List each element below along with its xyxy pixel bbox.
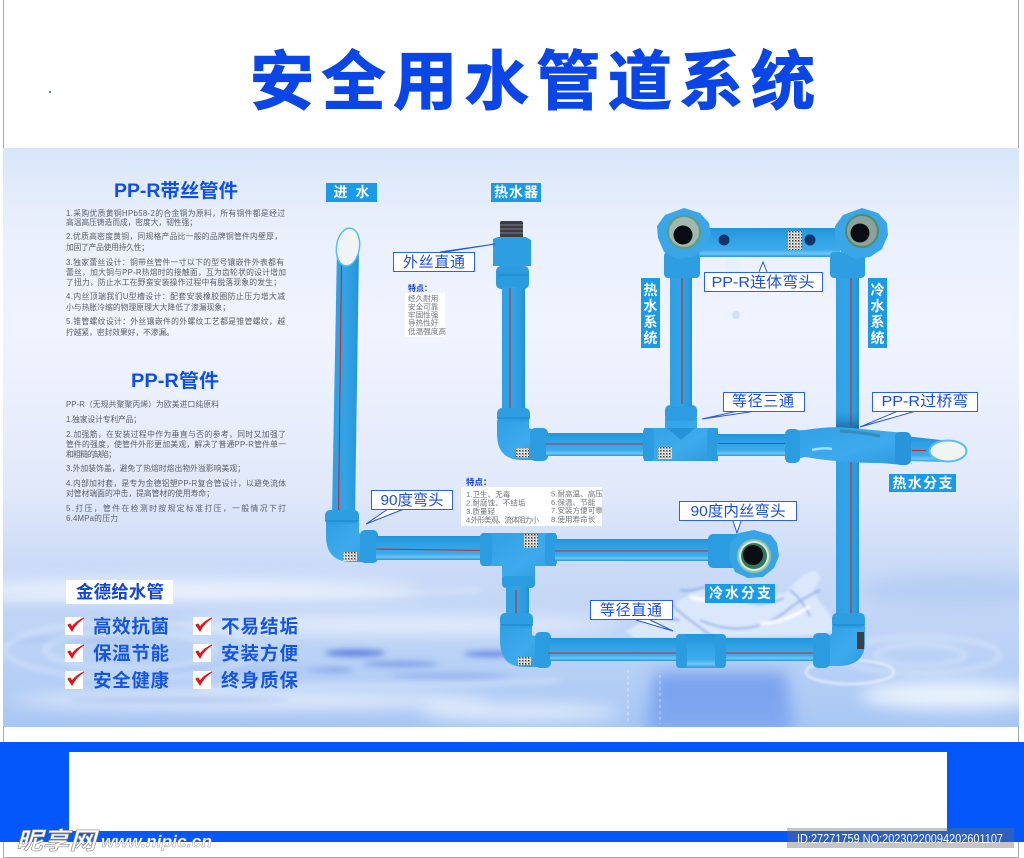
lower right elbow xyxy=(813,613,865,668)
body list: 高温高压铸造而成，密度大，韧性强； xyxy=(66,217,197,227)
features heading: 特点： xyxy=(466,477,492,487)
QR sticker xyxy=(788,231,802,250)
lower left elbow xyxy=(500,613,551,668)
callout: PP-R joined elbow: PP-R连体弯头 xyxy=(712,274,814,291)
callout: equal tee: 等径三通 xyxy=(732,392,794,410)
features list: 经久耐用 xyxy=(408,293,438,303)
90 degree inner-thread elbow xyxy=(708,530,779,578)
text block: PP-R fittings xyxy=(66,369,286,523)
body list: PP-R（无规共聚聚丙烯）为欧美进口纯原料 xyxy=(66,399,219,409)
body list: 3.外加装饰盖，避免了热熔时熔出物外溢影响美观； xyxy=(66,463,245,473)
90 degree elbow xyxy=(325,510,378,563)
pipe reflection xyxy=(645,672,795,735)
callout: male-thread straight: 外丝直通 xyxy=(403,254,465,271)
callout: equal straight xyxy=(590,600,673,631)
body list: 了扭力，防止水工在野蛮安装操作过程中有脱落现象的发生； xyxy=(66,277,281,287)
tag: inlet: 进 水 xyxy=(334,184,370,200)
features list: 4.外形美观、流体阻力小 xyxy=(466,514,539,524)
outlet pipe to inner-thread elbow xyxy=(555,539,710,561)
tag: water heater: 热水器 xyxy=(494,184,538,200)
watermark id xyxy=(787,828,1014,848)
body list: 4.内丝顶端我们U型槽设计：配套安装橡胶圈防止压力增大减 xyxy=(66,291,285,301)
tag: cold water system: 冷 xyxy=(870,282,884,298)
callout: 90 degree inner-thread elbow xyxy=(680,502,796,533)
crossover elbow xyxy=(785,427,911,465)
stem pipe xyxy=(506,586,529,616)
right threaded port xyxy=(835,208,888,259)
body list: 4.内部加衬套，是专为金德铝塑PP-R复合管设计，以避免流体 xyxy=(66,478,286,488)
tag: hot water system: 热 xyxy=(644,282,658,298)
tag: hot water system: 系 xyxy=(644,314,658,330)
hot branch opening xyxy=(930,440,966,462)
pipe: cold water riser xyxy=(813,262,865,668)
callout: 90 degree inner-thread elbow: 90度内丝弯头 xyxy=(690,503,786,520)
small dot xyxy=(49,91,51,93)
vertical pipe xyxy=(502,287,525,411)
mounting holes xyxy=(718,234,816,246)
body list: 6.4MPa的压力 xyxy=(66,513,118,523)
features list: 7.安装方便可靠 xyxy=(551,505,603,515)
callout: 90 degree elbow xyxy=(366,490,452,524)
pipe: hot water run xyxy=(493,221,966,465)
watermark logo: www.nipic.cn xyxy=(101,832,212,851)
body list: 5.锥管螺纹设计：外丝镶嵌件的外螺纹工艺都是锥管螺纹，越 xyxy=(66,316,285,326)
hot elbow xyxy=(497,408,548,461)
callout: PP-R crossover xyxy=(860,392,978,427)
features list: 3.质量轻 xyxy=(466,506,496,516)
hot riser xyxy=(670,262,692,407)
body list: 蕾丝，加大铜与PP-R热熔时的接触面，互为齿轮状的设计增加 xyxy=(66,267,286,277)
horizontal pipe to tee xyxy=(376,536,484,560)
body list: 管件的强度，使管件外形更加美观，解决了普通PP-R管件单一 xyxy=(66,439,286,449)
background panel: water xyxy=(0,148,1024,735)
water splash xyxy=(625,571,894,684)
body list xyxy=(66,399,286,523)
features list xyxy=(408,293,446,336)
features list: 导热性好 xyxy=(408,318,439,328)
heading: PP-R threaded fittings: PP-R带丝管件 xyxy=(114,179,238,202)
tag: hot water system xyxy=(641,278,660,348)
features list: 安全可靠 xyxy=(408,302,439,312)
panel: brand benefits xyxy=(65,580,298,691)
body list: 加固了产品使用持久性； xyxy=(66,242,149,252)
footer band xyxy=(0,742,1024,842)
water droplets xyxy=(725,258,741,319)
tag: cold water system xyxy=(868,278,887,348)
hot branch tail red line xyxy=(912,450,926,452)
callout: PP-R joined elbow xyxy=(704,262,822,292)
features list: 2.耐腐蚀、不结垢 xyxy=(466,498,526,508)
pipe: inlet run xyxy=(325,227,816,668)
lower horizontal pipe xyxy=(550,638,816,661)
watermark logo: 昵享网 xyxy=(16,828,99,855)
features list: 1.卫生、无毒 xyxy=(466,489,511,499)
horizontal hot pipe left xyxy=(546,433,646,456)
callout: male-thread straight xyxy=(394,244,495,272)
features list: 5.耐高温、高压 xyxy=(551,488,603,498)
callout: 90 degree elbow: 90度弯头 xyxy=(380,492,444,509)
watermark logo xyxy=(16,828,212,855)
body list: 5.打压，管件在检测时按规定标准打压，一般情况下打 xyxy=(66,503,286,513)
tag: cold water system: 水 xyxy=(870,298,884,314)
left cuff xyxy=(664,252,700,278)
body list xyxy=(66,208,286,337)
right cuff xyxy=(830,252,865,278)
features list: 低温强度高 xyxy=(408,326,446,336)
benefit: high antibacterial: 高效抗菌 xyxy=(93,616,169,637)
body list: 1.采购优质黄铜HPb58-2的合金铜为原料，所有铜件都是经过 xyxy=(66,208,285,218)
body list: 拧越紧，密封效果好，不渗漏。 xyxy=(66,327,174,337)
benefit: easy install: 安装方便 xyxy=(221,643,298,664)
body list: 和粗糙的缺陷； xyxy=(66,449,116,459)
features box: straight fitting xyxy=(405,283,446,337)
benefit: insulation: 保温节能 xyxy=(93,643,169,664)
benefit: no scaling: 不易结垢 xyxy=(221,616,298,637)
tag: cold water system: 系 xyxy=(870,314,884,330)
features heading: 特点： xyxy=(408,283,432,293)
callout: equal straight: 等径直通 xyxy=(600,601,662,619)
title: 安全用水管道系统 xyxy=(250,46,815,118)
hot branch tail xyxy=(905,436,950,462)
callout: equal tee xyxy=(702,392,804,419)
body list: 2.优质高密度黄铜，同规格产品比一般的品牌铜管件内壁厚， xyxy=(66,231,282,241)
tag: hot water system: 统 xyxy=(644,330,658,346)
tag: inlet xyxy=(326,183,377,202)
text block: PP-R threaded fittings xyxy=(66,179,286,337)
features list: 牢固性强 xyxy=(408,310,439,320)
tag: cold water branch: 冷水分支 xyxy=(709,585,771,601)
benefit: lifetime warranty: 终身质保 xyxy=(221,670,298,691)
tee fitting xyxy=(480,533,557,588)
body list: 2.加强筋，在安装过程中作为垂直与否的参考，同时又加强了 xyxy=(66,429,286,439)
male-thread straight fitting xyxy=(493,221,531,289)
body list: 3.独家蕾丝设计：铜带丝管件一寸以下的型号镶嵌件外表都有 xyxy=(66,257,284,267)
body list: 1.独家设计专利产品； xyxy=(66,414,141,424)
features box: PP-R pipe xyxy=(461,477,603,526)
tag: hot water branch: 热水分支 xyxy=(892,475,952,491)
tag: cold water system: 统 xyxy=(870,330,884,346)
plate xyxy=(698,228,840,257)
tag: hot water system: 水 xyxy=(644,298,658,314)
straight coupling xyxy=(676,634,726,668)
body list: 对管材端面的冲击，提高管材的使用寿命； xyxy=(66,488,214,498)
features list xyxy=(466,488,603,524)
inlet vertical pipe xyxy=(332,247,359,516)
benefit: safe and healthy: 安全健康 xyxy=(93,670,169,691)
features list: 6.保温、节能 xyxy=(551,497,596,507)
brand label: 金德给水管 xyxy=(76,582,164,602)
equal tee xyxy=(643,405,718,461)
fitting: PP-R joined elbow bracket xyxy=(657,208,888,278)
features list: 8.使用寿命长 xyxy=(551,514,596,524)
ripples xyxy=(3,590,1000,690)
heading: PP-R fittings: PP-R管件 xyxy=(131,369,219,392)
inlet opening xyxy=(334,227,362,267)
brand label xyxy=(66,580,173,604)
body list: 小与热胀冷缩的物理原理大大降低了渗漏现象； xyxy=(66,302,230,312)
horizontal hot pipe right xyxy=(717,434,787,456)
left threaded port xyxy=(657,208,711,259)
callout: PP-R crossover: PP-R过桥弯 xyxy=(882,393,968,410)
